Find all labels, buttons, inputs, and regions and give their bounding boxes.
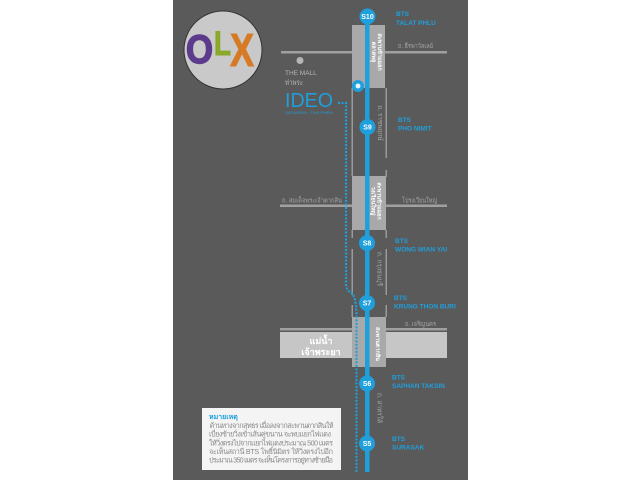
logo: Ideo: SATHORN - THA PHRA bbox=[285, 110, 333, 115]
road label: Taksin bridge north: ตลาดพลู bbox=[369, 42, 377, 63]
note body: ด้านทางจากสุทธร เมื่อลงจากสะพานตากสินให้ bbox=[210, 421, 334, 430]
station label: BTS bbox=[392, 374, 405, 382]
landmark: The Mall: ท่าพระ bbox=[285, 78, 303, 87]
road label: Krung Thon Buri: ถ. กรุงธนบุรี bbox=[376, 252, 384, 287]
road label: Wong Wian Yai block bbox=[370, 182, 384, 220]
station: S5 bbox=[359, 436, 424, 452]
road label: Taksin bridge: สะพานตากสิน bbox=[374, 327, 381, 361]
road label: Somdet Phra Chao Taksin: ถ. สมเด็จพระเจ้าตากสิน bbox=[282, 196, 342, 204]
road label: Wong Wian Yai block: สะพานข้ามแยก bbox=[376, 182, 384, 220]
station: S6: S6 bbox=[363, 381, 371, 388]
BTS line bbox=[365, 16, 370, 472]
road label: Ratchaphruek: ถ. ราชพฤกษ์ bbox=[376, 105, 384, 141]
logo: OLX: O bbox=[186, 28, 213, 72]
station: S9: S9 bbox=[363, 124, 372, 132]
station: S8 bbox=[359, 235, 447, 254]
logo: OLX: L bbox=[214, 25, 231, 63]
station label: BTS bbox=[396, 11, 409, 18]
road label: Charoen Nakhon: ถ. เจริญนคร bbox=[405, 320, 436, 328]
station: S7: S7 bbox=[363, 300, 371, 308]
note body: จะเห็นสถานี BTS โพธิ์นิมิตร ให้วิ่งตรงไปอีก bbox=[209, 446, 333, 456]
river block: Chao Phraya: เจ้าพระยา bbox=[301, 347, 341, 357]
road label: Charoen Rat top: ถ. ธีรพาวัลเลย์ bbox=[398, 42, 433, 50]
roads and city blocks bbox=[280, 25, 447, 367]
callout: directions note bbox=[202, 408, 341, 470]
note body: เบี่ยงซ้ายวิ่งเข้าเส้นคู่ขนาน จะพบแยกไฟแดง bbox=[209, 430, 331, 438]
station label: SURASAK bbox=[392, 444, 424, 452]
station: S9 bbox=[360, 117, 432, 135]
station: S8: S8 bbox=[363, 240, 371, 248]
station: S6 bbox=[359, 374, 445, 392]
river block: Chao Phraya bbox=[280, 332, 447, 358]
road label: Wongwian Yai roundabout: โปรงเวียนใหญ่ bbox=[402, 196, 437, 204]
station marker: exit 1 bbox=[352, 80, 364, 92]
station: S5: S5 bbox=[363, 441, 371, 448]
note body: ให้วิ่งตรงไปจากแยกไฟแดงประมาณ 500 เมตร bbox=[209, 438, 333, 448]
station label: WONG WIAN YAI bbox=[395, 246, 447, 254]
note body: ประมาณ 350 เมตร จะเห็นโครงการอยู่ทางซ้ายมือ bbox=[209, 454, 333, 464]
station label: SAPHAN TAKSIN bbox=[392, 383, 445, 390]
panel: map background bbox=[173, 0, 468, 480]
station label: BTS bbox=[394, 295, 407, 302]
station label: BTS bbox=[392, 436, 405, 443]
station: S7 bbox=[359, 295, 456, 311]
road label: Taksin bridge north: สะพานข้ามแยก bbox=[376, 33, 384, 71]
station: S10: S10 bbox=[361, 14, 374, 21]
road label: Wong Wian Yai block: วงเวียนใหญ่ bbox=[370, 187, 378, 216]
station label: PHO NIMIT bbox=[398, 126, 432, 132]
road label: Taksin bridge north bbox=[369, 33, 384, 71]
station label: TALAT PHLU bbox=[396, 20, 436, 27]
landmark: The Mall: THE MALL bbox=[285, 70, 317, 77]
note heading: หมายเหตุ bbox=[209, 414, 238, 421]
logo: OLX bbox=[184, 11, 262, 89]
station label: BTS bbox=[398, 117, 411, 124]
logo: OLX: X bbox=[230, 24, 254, 76]
walking route dotted line bbox=[338, 103, 356, 472]
road label: Sathorn: ถ. สาทรใต้ bbox=[376, 393, 384, 423]
logo: Ideo: IDEO bbox=[285, 90, 333, 112]
landmark: The Mall bbox=[285, 57, 317, 87]
station label: KRUNG THON BURI bbox=[394, 304, 456, 310]
station label: BTS bbox=[395, 238, 408, 245]
station: S10 bbox=[360, 8, 436, 27]
river label: แม่น้ำ bbox=[310, 334, 332, 346]
